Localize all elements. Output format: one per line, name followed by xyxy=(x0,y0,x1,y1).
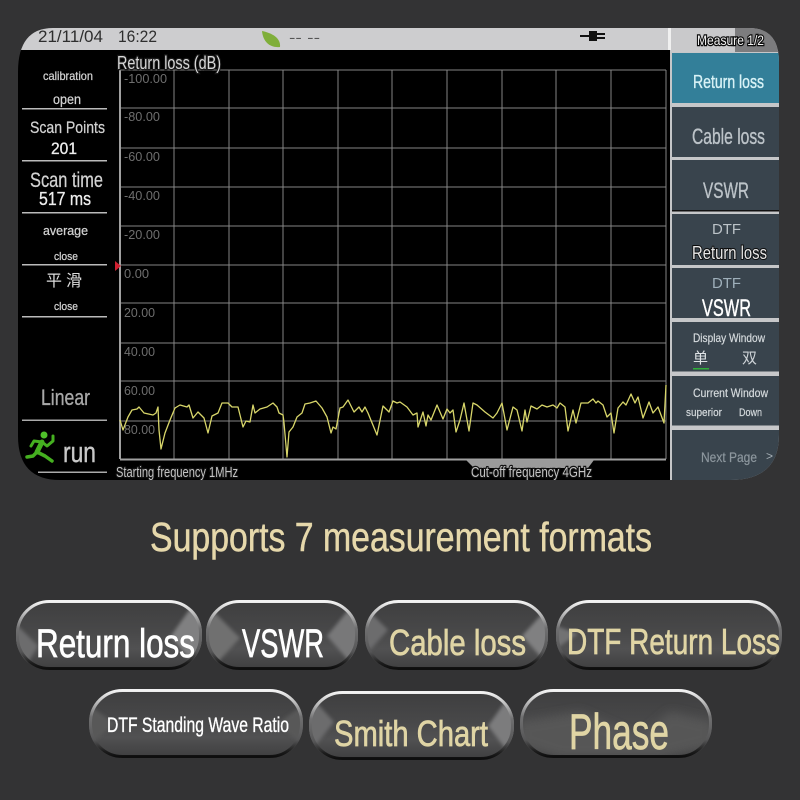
setting: scan time xyxy=(22,169,107,214)
y-axis labels: -20.00 xyxy=(124,227,160,242)
y-axis labels: -100.00 xyxy=(124,71,167,86)
menu header: Measure 1/2 xyxy=(697,32,764,48)
menu item: current window xyxy=(672,376,779,426)
label: start frequency: Starting frequency 1MHz xyxy=(116,464,238,481)
setting: smoothing: 平滑 xyxy=(46,267,82,291)
menu item: vswr xyxy=(672,160,779,212)
y-axis labels: 80.00 xyxy=(124,422,155,437)
setting: average: average xyxy=(43,223,88,238)
icon: plug xyxy=(580,31,605,41)
menu item: next page: > xyxy=(766,449,773,463)
setting: calibration: calibration xyxy=(43,69,93,83)
menu item: vswr: VSWR xyxy=(703,178,749,203)
panel: analyzer screen xyxy=(18,27,779,481)
button: phase xyxy=(520,689,712,760)
icon: running figure xyxy=(27,432,53,461)
menu item: next page: Next Page xyxy=(701,449,757,465)
button: vswr: VSWR xyxy=(242,622,324,666)
y-axis labels: 0.00 xyxy=(124,266,149,281)
label: cut-off frequency: Cut-off frequency 4GHz xyxy=(471,464,592,481)
panel: left settings column xyxy=(22,69,107,473)
setting: smoothing xyxy=(22,272,107,318)
menu item: dtf return loss xyxy=(672,214,779,265)
setting: smoothing: close xyxy=(54,301,78,313)
button: dtf return loss xyxy=(554,600,782,670)
menu item: dtf return loss: DTF xyxy=(712,221,741,238)
setting: scan points xyxy=(22,118,107,162)
setting: scan points: Scan Points xyxy=(30,118,105,137)
trace line xyxy=(120,385,666,457)
status dashes: -- -- xyxy=(289,29,320,45)
y-axis labels: 20.00 xyxy=(124,305,155,320)
button: cable loss: Cable loss xyxy=(389,622,526,663)
y-axis labels: 40.00 xyxy=(124,344,155,359)
setting: scan points: 201 xyxy=(51,139,77,158)
setting: average xyxy=(22,228,107,266)
heading: Supports 7 measurement formats xyxy=(150,514,652,560)
menu item: current window: Down xyxy=(739,407,762,419)
button: cable loss xyxy=(363,600,550,670)
menu item: dtf vswr: DTF xyxy=(712,275,741,292)
menu item: cable loss xyxy=(672,107,779,157)
panel: screen black background xyxy=(18,28,779,480)
setting: average: close xyxy=(54,251,78,263)
menu item: dtf return loss: Return loss xyxy=(692,243,767,263)
y-axis labels: -80.00 xyxy=(124,109,160,124)
button: dtf standing wave ratio: DTF Standing Wave Ratio xyxy=(107,714,289,737)
y-axis labels: -40.00 xyxy=(124,188,160,203)
menu item: dtf vswr: VSWR xyxy=(702,295,751,322)
setting: linear: Linear xyxy=(41,385,90,410)
menu item: dtf vswr xyxy=(672,268,779,322)
button: return loss xyxy=(14,600,204,672)
menu item: return loss: Return loss xyxy=(693,72,764,92)
menu item: display window: 单 xyxy=(693,347,708,368)
panel: right menu xyxy=(668,28,779,480)
icon: leaf xyxy=(262,31,280,47)
button: vswr xyxy=(204,600,360,670)
button: smith chart: Smith Chart xyxy=(334,713,488,754)
status time: 16:22 xyxy=(118,27,157,46)
button: dtf standing wave ratio xyxy=(89,689,303,758)
marker: reference arrow xyxy=(115,261,121,271)
menu item: current window: superior xyxy=(686,407,722,419)
setting: calibration xyxy=(22,69,107,110)
run label: run xyxy=(63,437,96,469)
setting: linear xyxy=(22,385,107,421)
menu header xyxy=(671,28,779,52)
chart grid xyxy=(120,70,666,460)
panel: status bar xyxy=(18,27,668,50)
y-axis labels xyxy=(124,71,167,437)
menu item: display window: Display Window xyxy=(693,331,765,345)
setting: scan time: Scan time xyxy=(30,169,103,192)
y-axis labels: -60.00 xyxy=(124,149,160,164)
menu item: return loss xyxy=(672,53,779,103)
menu item: current window: Current Window xyxy=(693,386,768,400)
chart title: Return loss (dB) xyxy=(117,53,221,73)
button: phase: Phase xyxy=(569,704,669,760)
button: smith chart xyxy=(307,691,516,760)
menu item: cable loss: Cable loss xyxy=(692,124,765,149)
setting: scan time: 517 ms xyxy=(39,189,91,209)
button: return loss: Return loss xyxy=(36,622,195,666)
label: cut-off frequency xyxy=(466,460,594,481)
menu item: display window: 双 xyxy=(742,347,757,368)
setting: calibration: open xyxy=(53,91,81,107)
menu item: display window xyxy=(672,322,779,372)
status date: 21/11/04 xyxy=(38,27,103,46)
chart: return loss trace xyxy=(115,70,666,460)
menu item: next page xyxy=(672,430,779,480)
y-axis labels: 60.00 xyxy=(124,383,155,398)
